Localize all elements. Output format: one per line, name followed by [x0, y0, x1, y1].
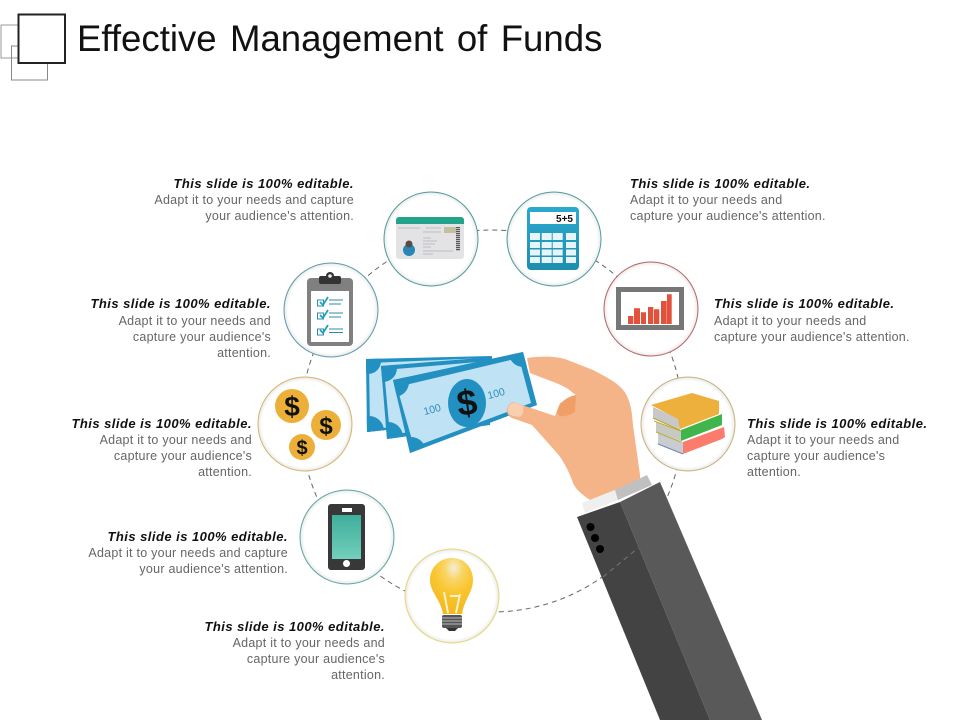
circle: bar chart	[604, 262, 698, 356]
circle: coins	[258, 377, 352, 471]
text block: bottom	[204, 619, 385, 682]
text block: upper left: capture your audience's	[133, 330, 271, 344]
text block: upper right: capture your audience's attention.	[714, 330, 910, 344]
icon: clipboard checklist	[307, 272, 353, 346]
icon: title frame squares	[1, 14, 65, 80]
icon: id card	[396, 217, 464, 259]
text block: upper left: attention.	[217, 346, 271, 360]
text block: middle right: attention.	[747, 465, 801, 479]
text block: bottom: attention.	[331, 668, 385, 682]
text block: top right: Adapt it to your needs and	[630, 193, 782, 207]
banknotes: 100	[422, 402, 442, 418]
text block: upper left	[90, 296, 271, 360]
title: Effective Management of Funds	[77, 18, 602, 59]
circle: smartphone	[300, 490, 394, 584]
text block: lower left: your audience's attention.	[139, 562, 288, 576]
icon: bar chart in frame	[618, 290, 682, 328]
text block: upper right: This slide is 100% editable.	[714, 296, 895, 311]
icon: dollar coins	[275, 389, 341, 460]
icon: dollar coins: $	[319, 413, 333, 440]
banknotes: 100	[486, 386, 506, 402]
text block: top left: This slide is 100% editable.	[173, 176, 354, 191]
text block: middle left: capture your audience's	[114, 449, 252, 463]
text block: middle left: This slide is 100% editable.	[71, 416, 252, 431]
text block: bottom: capture your audience's	[247, 652, 385, 666]
hand	[507, 357, 640, 500]
text block: lower left	[88, 529, 288, 576]
text block: middle right: This slide is 100% editable.	[747, 416, 928, 431]
icon: dollar coins: $	[296, 438, 308, 460]
text block: bottom: Adapt it to your needs and	[233, 636, 385, 650]
text block: top right: This slide is 100% editable.	[630, 176, 811, 191]
text block: top right: capture your audience's attention.	[630, 209, 826, 223]
icon: light bulb	[430, 558, 473, 631]
circle: id card	[384, 192, 478, 286]
text block: upper left: Adapt it to your needs and	[119, 314, 271, 328]
icon: calculator: 5+5	[556, 214, 573, 225]
text block: top left: your audience's attention.	[205, 209, 354, 223]
text block: middle left: Adapt it to your needs and	[100, 433, 252, 447]
shirt cuff	[582, 475, 652, 513]
text block: middle left	[71, 416, 252, 479]
icon: smartphone	[328, 504, 365, 570]
text block: top right	[630, 176, 826, 223]
circle: light bulb	[405, 549, 499, 643]
text block: lower left: This slide is 100% editable.	[107, 529, 288, 544]
text block: middle right: Adapt it to your needs and	[747, 433, 899, 447]
text block: middle left: attention.	[198, 465, 252, 479]
text block: bottom: This slide is 100% editable.	[204, 619, 385, 634]
text block: middle right: capture your audience's	[747, 449, 885, 463]
circle: clipboard	[284, 263, 378, 357]
arm with sleeve	[577, 482, 762, 720]
circle: calculator	[507, 192, 601, 286]
banknotes	[366, 352, 537, 453]
icon: stack of books	[651, 393, 725, 454]
dashed ring connecting the circles	[301, 230, 683, 612]
circle: books	[641, 377, 735, 471]
icon: dollar coins: $	[284, 391, 300, 422]
text block: lower left: Adapt it to your needs and capture	[88, 546, 288, 560]
text block: top left: Adapt it to your needs and capture	[154, 193, 354, 207]
text block: upper right: Adapt it to your needs and	[714, 314, 866, 328]
banknotes: $	[454, 381, 480, 424]
text block: upper right	[714, 296, 910, 344]
text block: middle right	[747, 416, 928, 479]
text block: top left	[154, 176, 354, 223]
text block: upper left: This slide is 100% editable.	[90, 296, 271, 311]
